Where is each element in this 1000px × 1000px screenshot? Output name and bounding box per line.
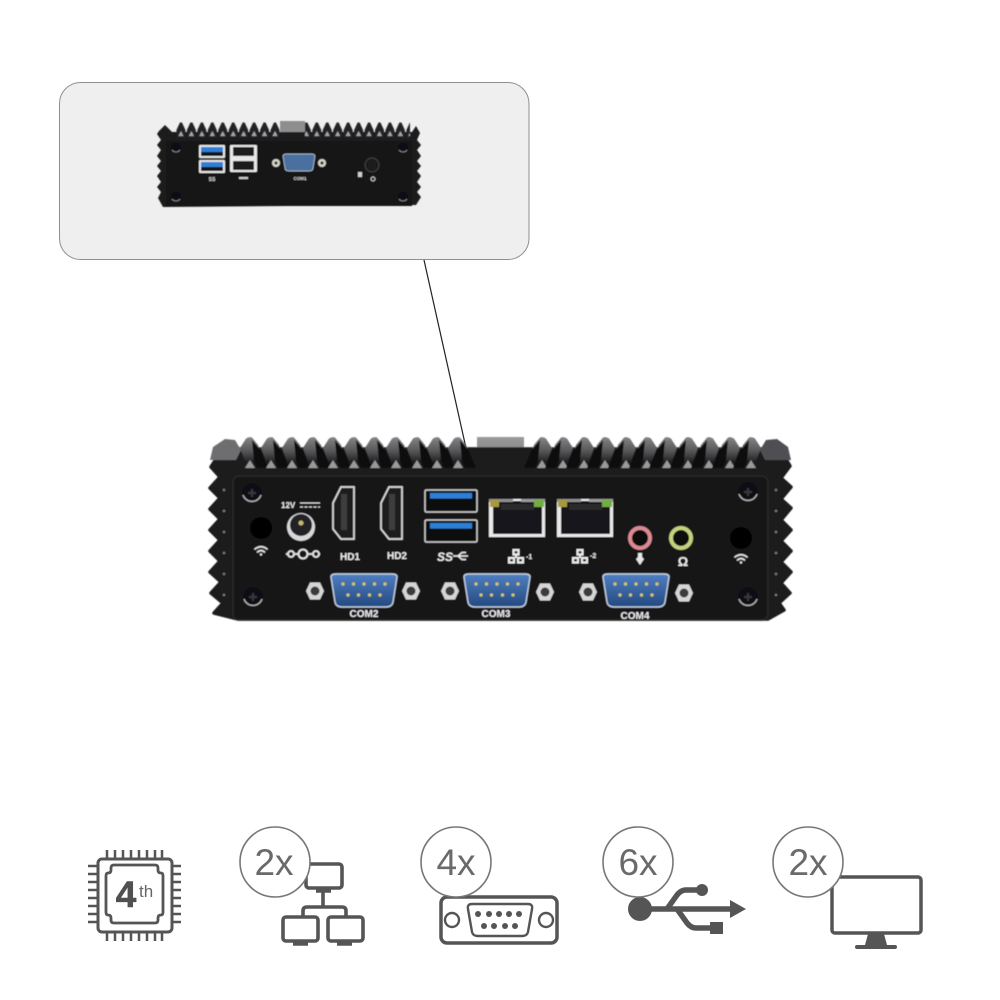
main device front view <box>210 437 791 622</box>
USB symbol <box>628 884 746 934</box>
COM labels: COM3 <box>482 609 511 620</box>
right fins <box>524 437 761 468</box>
audio icons <box>636 553 688 569</box>
icon: 4x serial port <box>421 827 557 943</box>
serial connector <box>441 897 557 943</box>
count badge 2x <box>773 827 843 897</box>
panel: rear view callout <box>60 82 529 260</box>
monitor <box>832 877 921 949</box>
count badge 2x: 2x <box>254 842 294 883</box>
rear view device <box>157 121 421 207</box>
LAN labels: -2 <box>590 553 596 560</box>
DC polarity symbol <box>286 550 320 558</box>
COM labels: COM4 <box>621 611 650 622</box>
USB 3 ports <box>425 490 477 542</box>
icon: 6x USB <box>603 827 746 934</box>
serial nuts <box>306 582 693 602</box>
COM4 port <box>603 574 669 607</box>
LAN ports <box>489 499 613 537</box>
mounting screws <box>242 482 758 607</box>
count badge 4x: 4x <box>436 842 476 883</box>
rear view device: COM1 <box>293 176 307 181</box>
USB 3 label: SS <box>437 550 453 564</box>
count badge 6x <box>603 827 673 897</box>
left antenna hole <box>250 517 272 539</box>
HDMI labels: HD2 <box>387 551 407 562</box>
icon: 4th gen CPU: th <box>139 882 153 901</box>
count badge 6x: 6x <box>618 842 658 883</box>
audio jacks <box>630 528 691 548</box>
HDMI ports <box>333 487 402 539</box>
COM2 port <box>331 574 397 607</box>
count badge 2x: 2x <box>788 842 828 883</box>
corner caps <box>210 439 241 460</box>
USB 3 label <box>437 550 468 564</box>
right antenna hole <box>730 527 752 549</box>
icon: 4th gen CPU: 4 <box>116 874 137 915</box>
chassis <box>210 449 791 619</box>
COM labels <box>350 609 650 622</box>
front panel <box>233 476 768 620</box>
icon: 2x LAN network <box>240 827 363 944</box>
LAN labels <box>509 550 596 562</box>
network diagram <box>283 864 363 944</box>
COM labels: COM2 <box>350 609 379 620</box>
handle <box>477 437 524 463</box>
side tooth details <box>223 489 777 596</box>
rear view device: SS <box>209 177 216 183</box>
HDMI labels <box>340 551 407 563</box>
DC jack <box>287 513 315 541</box>
12V label <box>281 501 320 510</box>
12V label: 12V <box>281 501 296 510</box>
connector line <box>424 260 466 448</box>
audio icons: Ω <box>678 554 688 569</box>
icon: 4th gen CPU <box>88 850 181 941</box>
LAN labels: -1 <box>526 554 532 561</box>
HDMI labels: HD1 <box>340 552 360 563</box>
wifi icons <box>255 547 747 564</box>
left fins <box>240 437 476 468</box>
COM3 port <box>464 574 530 607</box>
icon: 2x display <box>773 827 921 949</box>
